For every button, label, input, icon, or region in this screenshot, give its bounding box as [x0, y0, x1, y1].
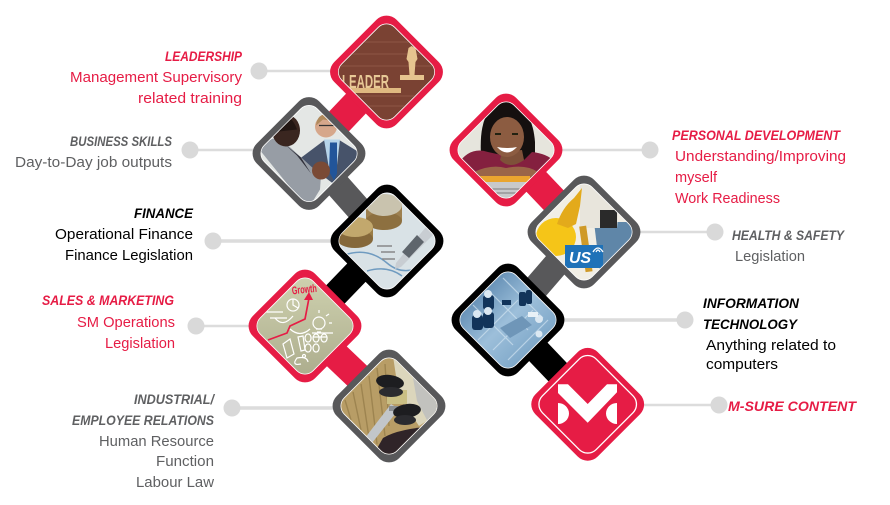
leader line: sales [188, 318, 250, 334]
diamond: health and safety photo [528, 176, 640, 288]
text: personal development: PERSONAL DEVELOPMENT [672, 128, 842, 143]
icon: m logo [558, 384, 617, 424]
leader line: m-sure [642, 396, 728, 414]
text: finance: Operational Finance [55, 226, 193, 243]
diamond: business skills photo [252, 97, 366, 210]
leader line: business skills [182, 142, 262, 158]
text: industrial and employee relations [72, 392, 215, 491]
diamond: sales and marketing sketch [248, 270, 362, 382]
diamond: m-sure logo [525, 342, 650, 467]
text: information technology: INFORMATION [703, 296, 799, 311]
connector: personal to health [506, 150, 584, 232]
text: information technology: TECHNOLOGY [703, 317, 799, 332]
text: business skills: Day-to-Day job outputs [15, 154, 172, 171]
leader line: industrial [224, 400, 334, 416]
text: business skills [15, 134, 172, 171]
diamond: information technology circuit board [452, 264, 564, 376]
leader line: health [638, 224, 724, 240]
leader line: finance [204, 232, 332, 250]
connector: sales to industrial [305, 326, 389, 406]
text: leadership: LEADERSHIP [165, 49, 243, 64]
diamond: health and safety photo: U S [569, 250, 591, 267]
text: information technology: computers [706, 356, 778, 373]
connector: leader to business skills [309, 72, 386, 153]
text: finance: FINANCE [134, 206, 194, 221]
text: sales and marketing: Legislation [105, 335, 175, 352]
text: health and safety: HEALTH & SAFETY [732, 228, 846, 243]
text: business skills: BUSINESS SKILLS [70, 134, 172, 149]
diamond: personal development portrait [450, 94, 562, 206]
leader line: personal [560, 142, 658, 158]
diamond: industrial relations gavel [332, 350, 446, 462]
connector: business skills to finance [309, 153, 387, 241]
leader line: IT [562, 312, 694, 328]
text: personal development: Work Readiness [675, 190, 780, 207]
text: sales and marketing [42, 293, 175, 352]
leader line: leadership [250, 62, 332, 80]
connector: IT to m-sure [508, 320, 588, 404]
text: industrial and employee relations: Function [156, 453, 214, 470]
text: information technology [703, 296, 836, 373]
diamond: sales and marketing sketch: Growth [291, 283, 318, 297]
diamond: leader photo: LEADER [342, 72, 389, 92]
diamond: finance photo [330, 184, 444, 298]
text: personal development: Understanding/Improving [675, 148, 846, 165]
text: industrial and employee relations: EMPLOYEE RELATIONS [72, 413, 214, 428]
text: finance [55, 206, 194, 264]
text: health and safety [732, 228, 846, 265]
text: leadership [70, 49, 243, 107]
connector: finance to sales [305, 241, 387, 326]
text: personal development: myself [675, 169, 718, 186]
text: health and safety: Legislation [735, 248, 805, 265]
text: finance: Finance Legislation [65, 247, 193, 264]
text: information technology: Anything related to [706, 337, 836, 354]
text: industrial and employee relations: INDUSTRIAL/ [134, 392, 215, 407]
connector: health to IT [508, 232, 584, 320]
diamond: leader photo [330, 16, 443, 128]
text: leadership: Management Supervisory [70, 69, 242, 86]
text: m-sure content: M-SURE CONTENT [728, 399, 858, 414]
text: leadership: related training [138, 90, 242, 107]
text: personal development [672, 128, 846, 207]
text: industrial and employee relations: Labour Law [136, 474, 214, 491]
text: sales and marketing: SM Operations [77, 314, 175, 331]
text: industrial and employee relations: Human Resource [99, 433, 214, 450]
text: sales and marketing: SALES & MARKETING [42, 293, 174, 308]
